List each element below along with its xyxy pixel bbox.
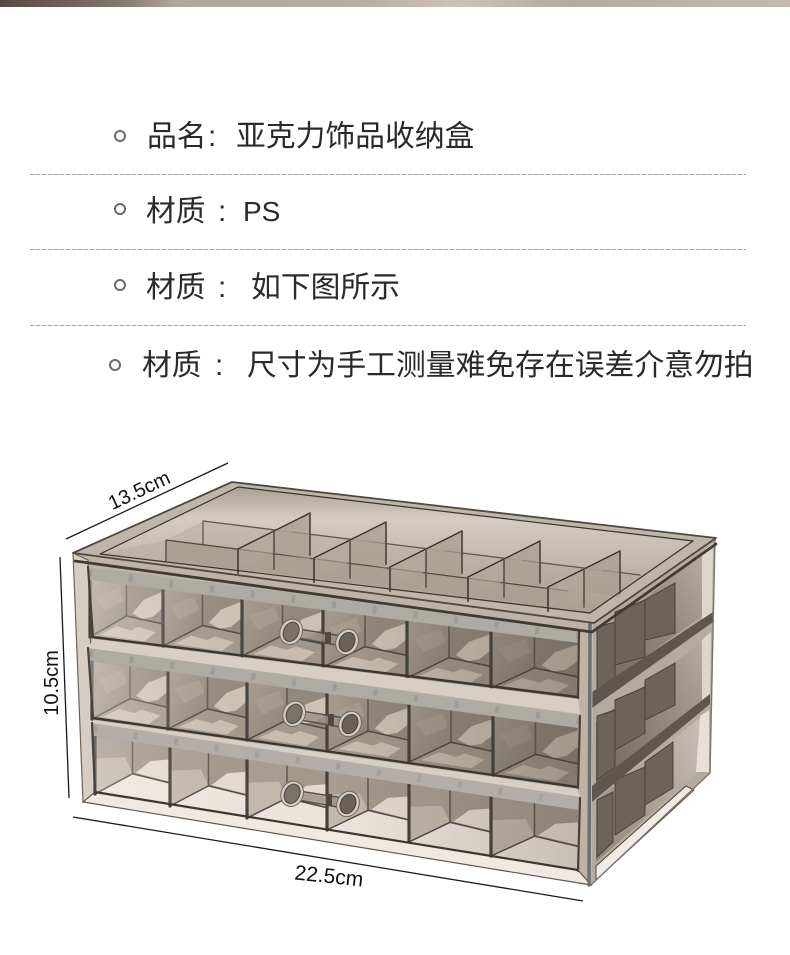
gap strip between drawers 2 and 3 (92, 720, 580, 797)
spec row: size as shown: 材质 (146, 271, 206, 304)
dimension: width: 22.5cm (293, 861, 364, 892)
spec row: measurement note: 材质 (142, 349, 202, 382)
spec row: size as shown (114, 271, 400, 304)
spec row: product name: : (208, 120, 216, 153)
spec row: measurement note: 尺寸为手工测量难免存在误差介意勿拍 (247, 349, 754, 382)
spec row: product name: 亚克力饰品收纳盒 (236, 120, 474, 153)
spec row: material PS (114, 195, 280, 228)
top photo strip (0, 0, 790, 7)
gap strip between drawers 1 and 2 (88, 639, 580, 714)
dimension: depth: 13.5cm (105, 467, 174, 515)
dimension: height: 10.5cm (41, 650, 63, 716)
spec row: material PS: : (218, 195, 226, 228)
drawer body backing (73, 553, 593, 885)
drawer 2 (88, 648, 581, 788)
dimension: width (73, 817, 583, 901)
dimension: depth (66, 463, 228, 539)
spec row: size as shown: : (218, 271, 226, 304)
drawer 3 (92, 723, 581, 871)
spec row: size as shown: 如下图所示 (251, 271, 400, 304)
spec row: product name (114, 120, 474, 153)
drawer 1 (87, 567, 581, 699)
spec row: material PS: PS (243, 196, 280, 227)
base strip (83, 792, 591, 885)
transparent lid (73, 482, 716, 632)
lid back divider wall (203, 521, 640, 575)
dimension: height (41, 557, 69, 798)
spec row: material PS: 材质 (146, 195, 206, 228)
right side panel (591, 538, 715, 885)
front right post (589, 624, 590, 885)
lid divider fins (238, 513, 620, 611)
lid front divider wall (166, 540, 568, 608)
spec row: measurement note: : (215, 349, 223, 382)
left frame (73, 553, 95, 802)
spec row: product name: 品名 (147, 120, 207, 153)
